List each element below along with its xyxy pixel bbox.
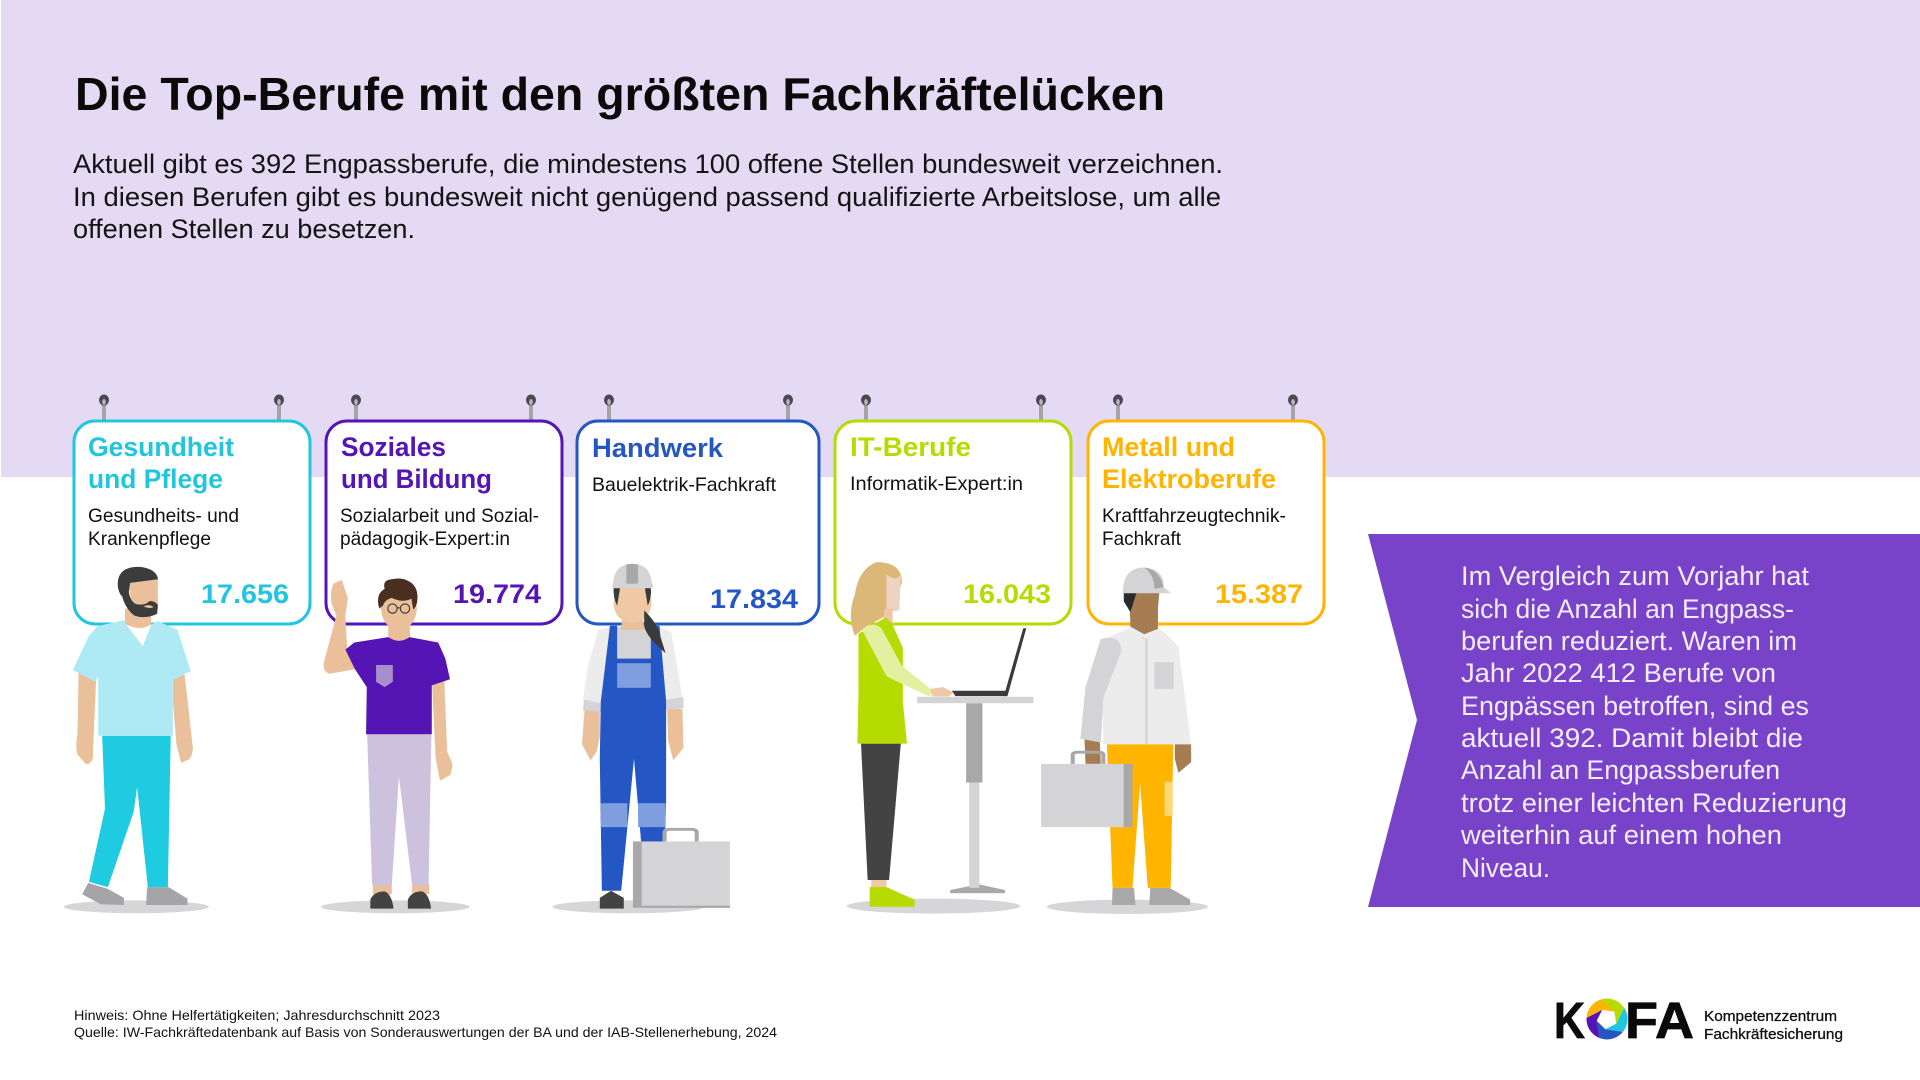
intro text: Aktuell gibt es 392 Engpassberufe, die mindestens 100 offene Stellen bundesweit verzeichnen. xyxy=(73,149,1223,179)
card heading: IT-Berufe xyxy=(850,432,971,462)
footnote and source xyxy=(74,1007,777,1040)
panel text: Anzahl an Engpassberufen xyxy=(1461,755,1780,785)
figure: craftswoman with toolbox xyxy=(552,564,730,913)
figure: IT expert at laptop xyxy=(847,562,1033,914)
panel: comparison with previous year xyxy=(1368,534,1920,907)
card heading: und Pflege xyxy=(88,464,223,494)
logo wordmark: Fachkräftesicherung xyxy=(1704,1026,1843,1043)
lavender header band xyxy=(1,0,1920,477)
occupation: Fachkraft xyxy=(1102,528,1182,550)
hanging pins xyxy=(861,394,1046,421)
occupation: Krankenpflege xyxy=(88,528,211,550)
card heading xyxy=(88,432,234,494)
card heading: und Bildung xyxy=(341,464,492,494)
card heading: Handwerk xyxy=(592,433,724,463)
panel text xyxy=(1460,561,1847,883)
figure: social worker xyxy=(321,578,470,913)
occupation: pädagogik-Expert:in xyxy=(340,528,510,550)
panel text: Niveau. xyxy=(1461,853,1550,883)
card frame xyxy=(577,421,819,624)
card: Soziales und Bildung xyxy=(326,394,562,624)
logo wordmark xyxy=(1704,1008,1843,1043)
number: 15.387 xyxy=(1215,579,1303,609)
figure: metal worker with case xyxy=(1041,567,1208,914)
card heading: Metall und xyxy=(1102,432,1235,462)
occupation xyxy=(88,505,239,550)
intro text: In diesen Berufen gibt es bundesweit nicht genügend passend qualifizierte Arbeitslose, um alle xyxy=(73,182,1221,212)
number: 19.774 xyxy=(453,579,541,609)
occupation xyxy=(340,505,539,550)
card heading: Gesundheit xyxy=(88,432,234,462)
figure: nurse xyxy=(64,567,209,913)
occupation: Kraftfahrzeugtechnik- xyxy=(1102,505,1286,527)
panel text: Engpässen betroffen, sind es xyxy=(1461,691,1809,721)
panel text: berufen reduziert. Waren im xyxy=(1461,626,1797,656)
panel text: aktuell 392. Damit bleibt die xyxy=(1461,723,1803,753)
occupation xyxy=(1102,505,1286,550)
panel shape xyxy=(1368,534,1920,907)
card heading xyxy=(1102,432,1276,494)
occupation: Sozialarbeit und Sozial- xyxy=(340,505,539,527)
hanging pins xyxy=(604,394,793,421)
logo letters FA: FA xyxy=(1625,992,1694,1049)
card: Handwerk xyxy=(577,394,819,624)
card heading: Elektroberufe xyxy=(1102,464,1276,494)
title: Die Top-Berufe mit den größten Fachkräftelücken xyxy=(75,68,1165,120)
hanging pins xyxy=(351,394,536,421)
card: IT-Berufe xyxy=(835,394,1071,624)
logo wordmark: Kompetenzzentrum xyxy=(1704,1008,1837,1025)
logo letter K: K xyxy=(1554,992,1585,1049)
card: Gesundheit und Pflege xyxy=(74,394,310,624)
footnote and source: Quelle: IW-Fachkräftedatenbank auf Basis von Sonderauswertungen der BA und der IAB-Stellenerhebung, 2024 xyxy=(74,1024,777,1040)
intro text xyxy=(73,149,1223,244)
hanging pins xyxy=(1113,394,1298,421)
occupation: Bauelektrik-Fachkraft xyxy=(592,474,777,496)
number: 17.656 xyxy=(201,579,289,609)
panel text: Im Vergleich zum Vorjahr hat xyxy=(1461,561,1809,591)
panel text: sich die Anzahl an Engpass- xyxy=(1461,594,1794,624)
hanging pins xyxy=(99,394,284,421)
card frame xyxy=(835,421,1071,624)
panel text: Jahr 2022 412 Berufe von xyxy=(1461,658,1776,688)
panel text: weiterhin auf einem hohen xyxy=(1460,820,1782,850)
card frame xyxy=(326,421,562,624)
footnote and source: Hinweis: Ohne Helfertätigkeiten; Jahresdurchschnitt 2023 xyxy=(74,1007,440,1023)
panel text: trotz einer leichten Reduzierung xyxy=(1461,788,1847,818)
card heading: Soziales xyxy=(341,432,446,462)
card frame xyxy=(1088,421,1324,624)
card heading xyxy=(341,432,492,494)
logo: KOFA xyxy=(1554,992,1843,1049)
card: Metall und Elektroberufe xyxy=(1088,394,1324,624)
logo aperture icon xyxy=(1586,998,1628,1039)
occupation: Informatik-Expert:in xyxy=(850,473,1023,495)
intro text: offenen Stellen zu besetzen. xyxy=(73,214,415,244)
number: 17.834 xyxy=(710,584,798,614)
number: 16.043 xyxy=(963,579,1051,609)
occupation: Gesundheits- und xyxy=(88,505,239,527)
card frame xyxy=(74,421,310,624)
